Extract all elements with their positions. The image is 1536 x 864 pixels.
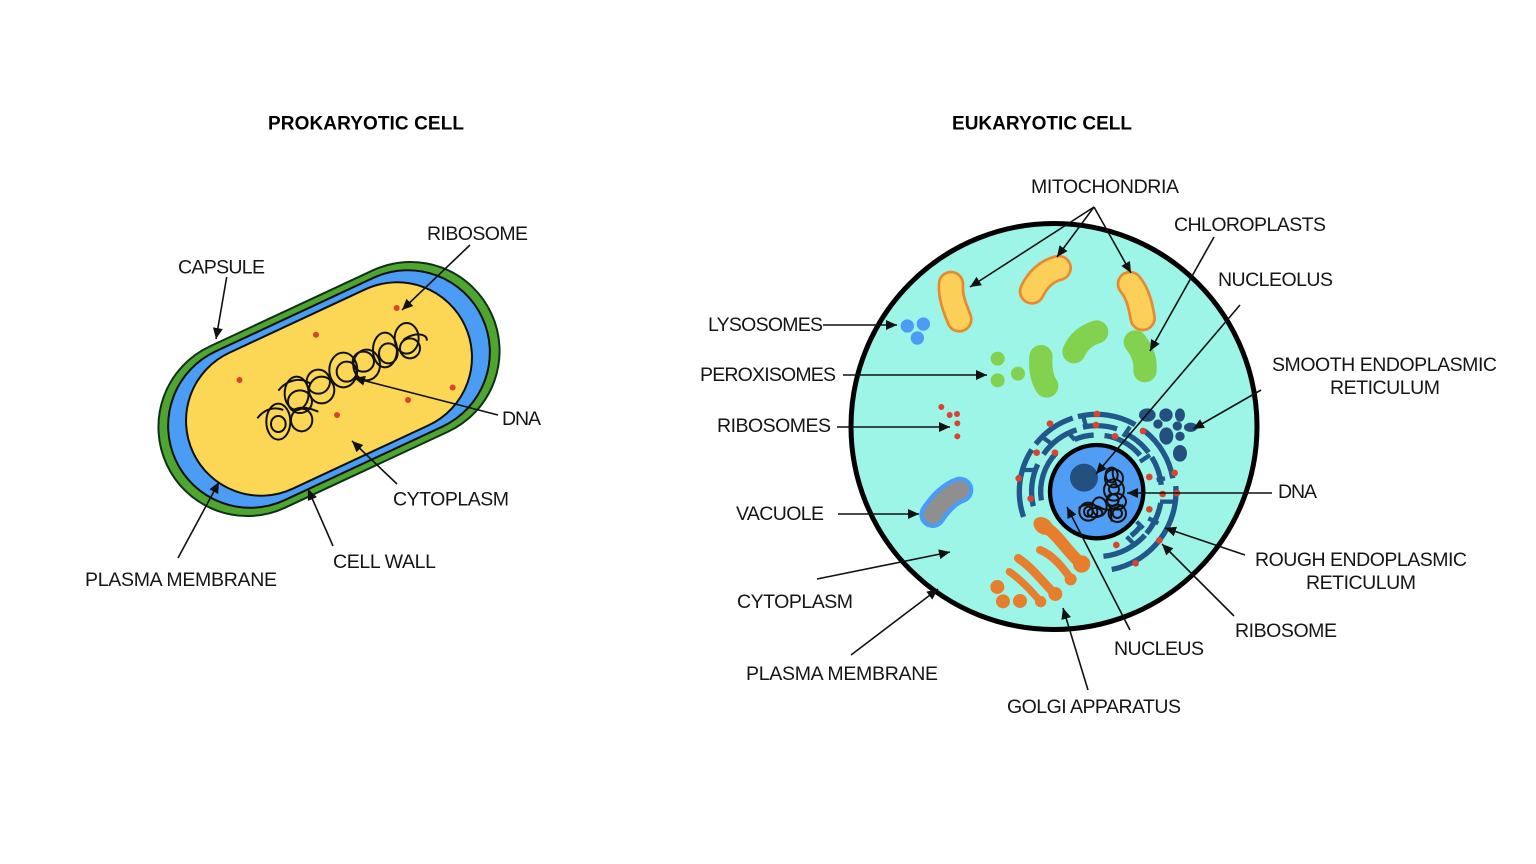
- peroxisomes: [991, 352, 1025, 387]
- lysosomes: [901, 317, 930, 345]
- label: cytoplasm eukaryote: CYTOPLASM: [737, 591, 853, 613]
- endoplasmic reticulum and nucleus: [988, 383, 1205, 600]
- arrow: ER ribosome: [1162, 544, 1234, 616]
- label: rough endoplasmic reticulum: RETICULUM: [1306, 572, 1416, 594]
- label: smooth endoplasmic reticulum: SMOOTH ENDOPLASMIC: [1272, 354, 1497, 376]
- arrow: capsule: [216, 277, 227, 339]
- label: lysosomes: LYSOSOMES: [708, 314, 823, 336]
- label: cytoplasm: CYTOPLASM: [393, 488, 509, 510]
- capsule layer: [129, 233, 529, 545]
- label: chloroplasts: CHLOROPLASTS: [1174, 214, 1326, 236]
- label: nuclear DNA: DNA: [1278, 481, 1317, 503]
- chloroplasts: [1041, 332, 1145, 386]
- arrow: nucleolus: [1096, 305, 1240, 474]
- arrow: DNA: [354, 378, 498, 415]
- label: rough endoplasmic reticulum: [1255, 549, 1467, 594]
- arrow: cell wall: [308, 489, 333, 546]
- smooth endoplasmic reticulum: [1139, 408, 1197, 462]
- golgi apparatus: [990, 513, 1090, 608]
- arrow: ribosomes: [837, 426, 950, 428]
- panel: prokaryotic cell diagram: [129, 233, 529, 545]
- free ribosomes: [938, 404, 960, 439]
- arrow: chloroplasts: [1150, 237, 1214, 351]
- DNA coil: [257, 323, 427, 440]
- label: cell wall: CELL WALL: [333, 551, 436, 573]
- label: nucleolus: NUCLEOLUS: [1218, 269, 1333, 291]
- plasma membrane and cytoplasm: [851, 224, 1257, 630]
- arrow: cytoplasm eukaryote: [817, 552, 950, 579]
- label: vacuole: VACUOLE: [736, 503, 824, 525]
- label: ribosomes: RIBOSOMES: [717, 415, 831, 437]
- title: prokaryotic cell: PROKARYOTIC CELL: [268, 114, 464, 134]
- label: golgi apparatus: GOLGI APPARATUS: [1007, 696, 1181, 718]
- arrow: mitochondria centre: [1057, 207, 1094, 257]
- arrow: nucleus: [1067, 507, 1130, 630]
- arrow: ribosome: [402, 245, 470, 310]
- arrow: plasma membrane: [178, 482, 219, 558]
- label: smooth endoplasmic reticulum: RETICULUM: [1330, 377, 1440, 399]
- arrow: nuclear DNA: [1127, 492, 1272, 494]
- label: DNA: DNA: [502, 408, 541, 430]
- arrow: mitochondria left: [970, 207, 1094, 287]
- ER ribosomes: [1015, 411, 1180, 567]
- label: mitochondria: MITOCHONDRIA: [1031, 176, 1179, 198]
- arrow: vacuole: [838, 513, 919, 515]
- arrow: peroxisomes: [843, 374, 987, 376]
- label: peroxisomes: PEROXISOMES: [700, 364, 836, 386]
- label: nucleus: NUCLEUS: [1114, 638, 1204, 660]
- vacuole: [933, 490, 960, 515]
- cytoplasm: [161, 258, 497, 520]
- arrow: smooth ER: [1193, 390, 1261, 429]
- mitochondria: [951, 268, 1143, 319]
- nucleolus: [1070, 464, 1098, 492]
- rough endoplasmic reticulum rings: [988, 383, 1205, 600]
- label: capsule: CAPSULE: [178, 256, 265, 278]
- arrow: rough ER: [1165, 528, 1245, 555]
- panel: eukaryotic cell diagram: [851, 224, 1257, 630]
- label: ER ribosome: RIBOSOME: [1235, 620, 1337, 642]
- nucleus: [1050, 445, 1143, 538]
- arrow: mitochondria right: [1094, 207, 1131, 273]
- label: smooth endoplasmic reticulum: [1272, 354, 1497, 399]
- label: plasma membrane eukaryote: PLASMA MEMBRANE: [746, 663, 938, 685]
- label: plasma membrane: PLASMA MEMBRANE: [85, 569, 277, 591]
- label: rough endoplasmic reticulum: ROUGH ENDOPLASMIC: [1255, 549, 1467, 571]
- connecting spokes: [1022, 417, 1173, 545]
- arrow: lysosomes: [823, 324, 897, 326]
- label: ribosome: RIBOSOME: [427, 223, 528, 245]
- ribosomes: [236, 305, 456, 418]
- nuclear DNA: [1079, 468, 1126, 522]
- title: eukaryotic cell: EUKARYOTIC CELL: [952, 114, 1132, 134]
- cell wall layer: [141, 243, 517, 535]
- arrow: golgi: [1063, 608, 1088, 690]
- arrow: cytoplasm: [352, 441, 397, 484]
- arrow: plasma membrane eukaryote: [851, 589, 938, 655]
